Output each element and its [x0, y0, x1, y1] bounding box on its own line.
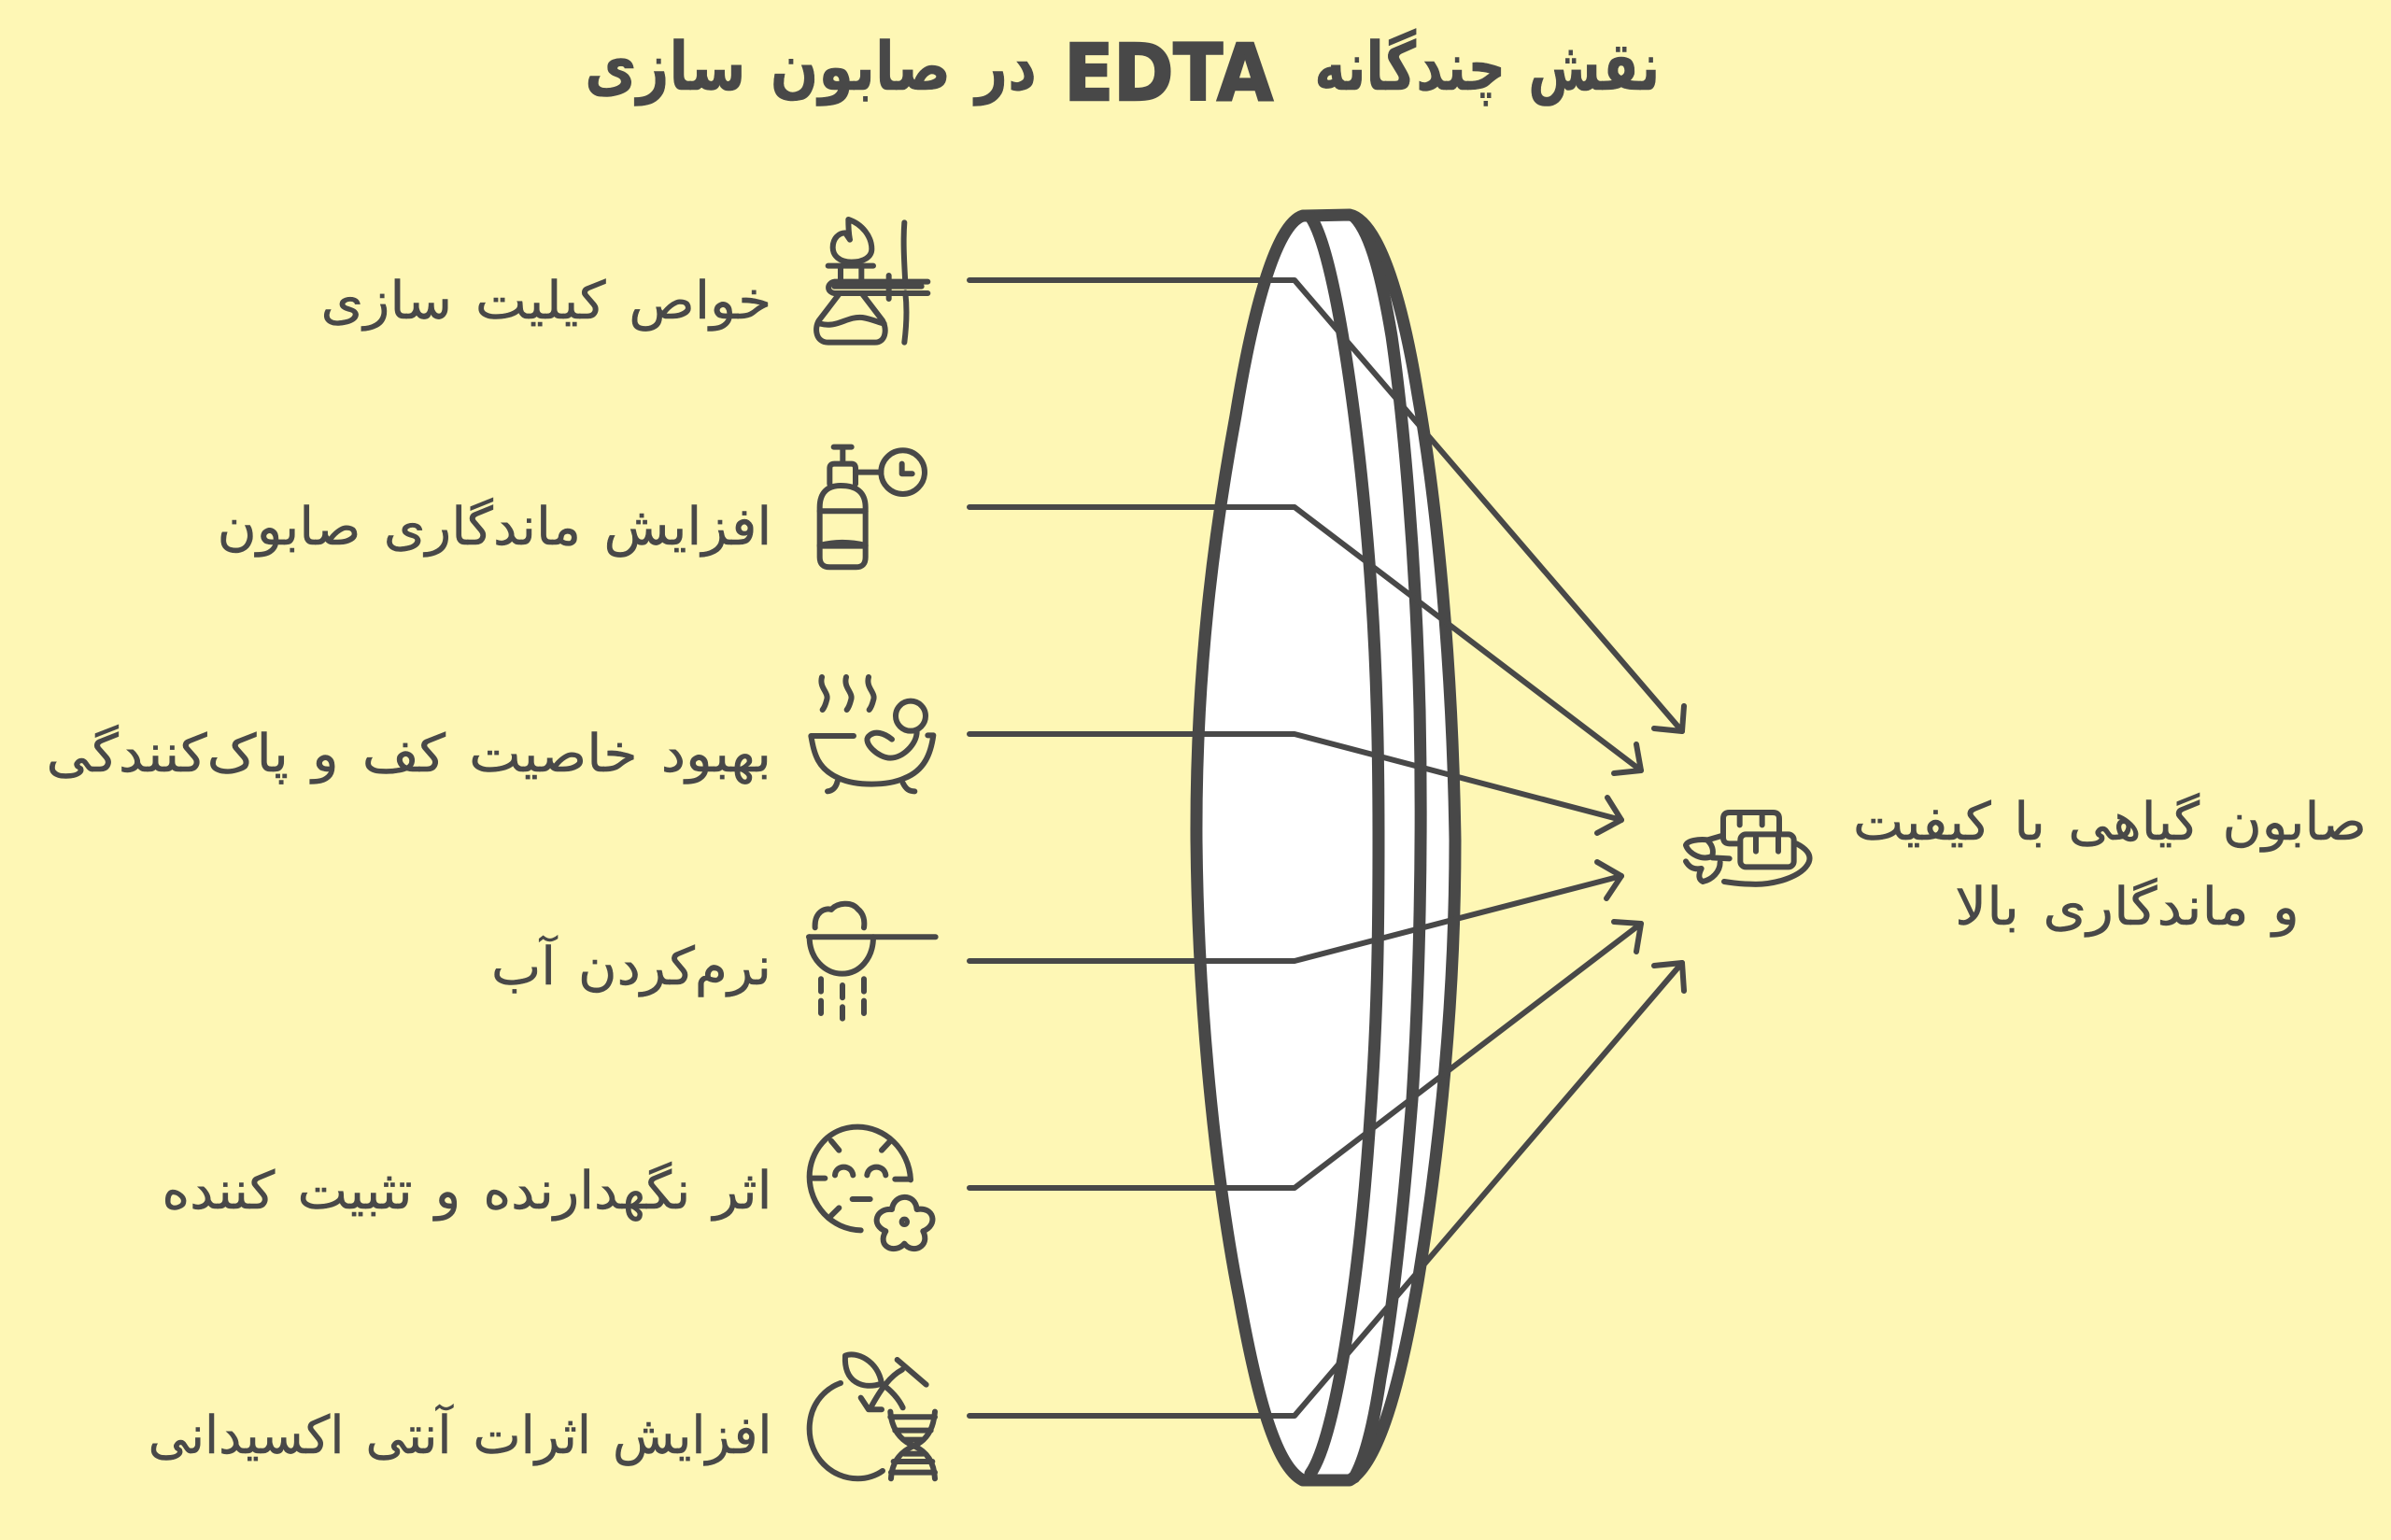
label: soap durability: افزایش ماندگاری صابون [217, 497, 771, 558]
result label: و ماندگاری بالا [1955, 877, 2299, 938]
title: EDTA [1065, 27, 1273, 119]
arrow 1 [969, 280, 1684, 731]
icon: scoop with falling drops [809, 904, 936, 1019]
arrow 4 [969, 862, 1621, 961]
icon: soap bottle with clock [820, 447, 925, 567]
label: chelation: خواص کیلیت سازی [320, 271, 771, 332]
icon: flame flask [816, 219, 927, 343]
label: antioxidant effects: افزایش اثرات آنتی اکسیدانی [148, 1406, 771, 1466]
label: preservative effect: اثر نگهدارنده و تثبیت کننده [162, 1161, 771, 1222]
arrow 6 [969, 963, 1684, 1416]
label: foam and cleaning: بهبود خاصیت کف و پاک‌کنندگی [46, 724, 771, 784]
label: water softening: نرم‌کردن آب [491, 937, 771, 997]
connector arrows [969, 280, 1684, 1416]
icon: face with flower [810, 1127, 932, 1249]
lens: stacked discs [1196, 215, 1455, 1480]
icon: soap bars on a dish with leaves [1686, 812, 1810, 884]
icon: apple, leaf and DNA [810, 1354, 935, 1478]
result label: صابون گیاهی با کیفیت [1853, 792, 2367, 853]
title: نقش چندگانه [1314, 27, 1660, 106]
arrow 5 [969, 922, 1641, 1188]
arrow 2 [969, 507, 1641, 773]
title: در صابون سازی [585, 27, 1037, 106]
arrow 3 [969, 734, 1621, 833]
result label [1853, 792, 2367, 938]
title [585, 27, 1660, 119]
icon: bathtub [811, 677, 933, 791]
